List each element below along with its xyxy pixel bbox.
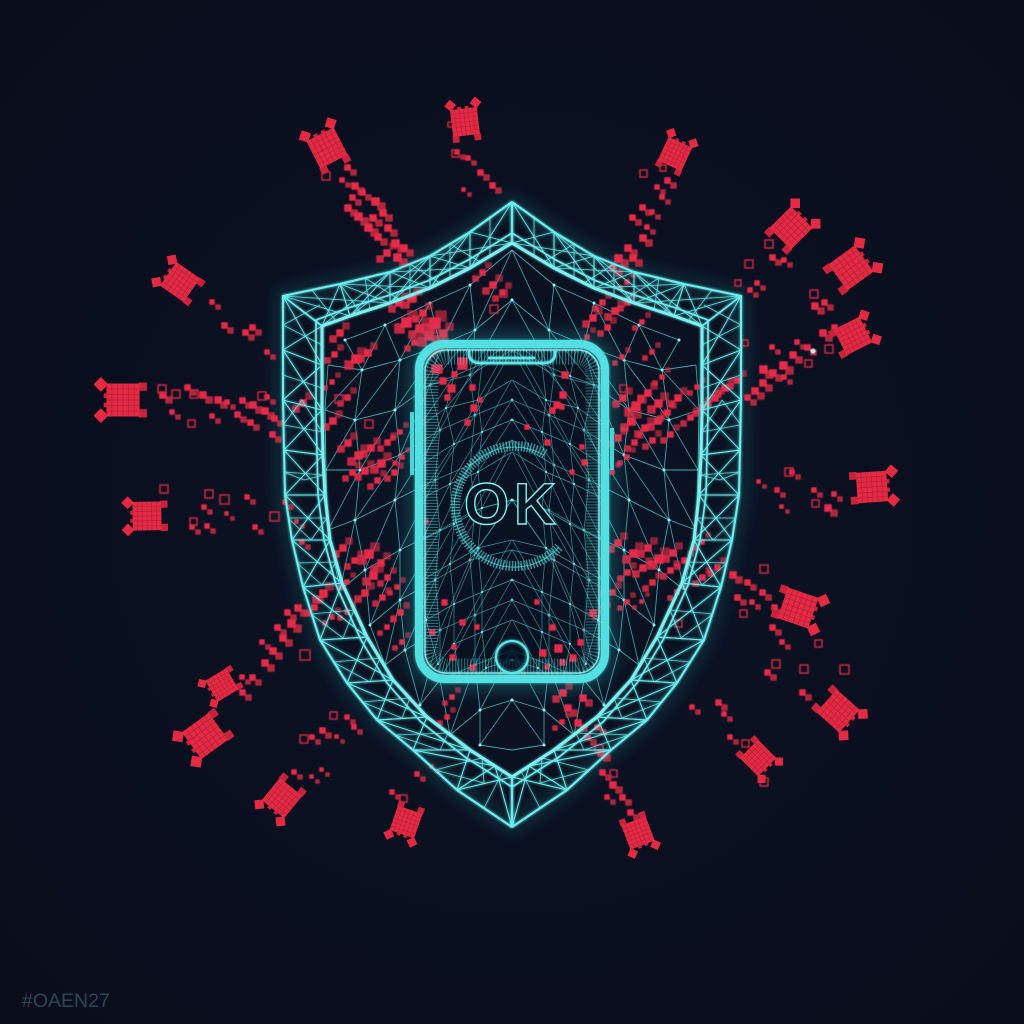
- bot 13: [250, 769, 311, 830]
- bot 8: [769, 579, 833, 639]
- bot 14: [168, 703, 238, 772]
- particles: hollow squares: [158, 122, 849, 802]
- shield band: left half: [283, 202, 512, 827]
- stray white node: [810, 348, 816, 354]
- shield glow: [283, 202, 741, 827]
- bot 5: [819, 233, 888, 300]
- particles: cluster density layer: [293, 256, 733, 730]
- phone body outline: [419, 344, 605, 679]
- bot 2: [443, 96, 486, 144]
- phone home button: [496, 641, 528, 673]
- phone glow: [415, 340, 609, 683]
- particles over phone: [425, 358, 596, 670]
- bot 17: [94, 377, 147, 423]
- bot 7: [848, 464, 901, 510]
- attacking bots: [94, 96, 901, 861]
- OK status ring: [454, 446, 560, 567]
- bot 3: [651, 126, 701, 179]
- malicious particle streams: [158, 122, 849, 820]
- OK label: OK: [464, 472, 556, 537]
- bot 1: [296, 114, 356, 177]
- particles: clusters inside shield: [300, 250, 740, 724]
- shield interior mesh: [325, 250, 699, 750]
- bot 11: [614, 809, 663, 861]
- shield band: right half: [512, 202, 741, 827]
- bot 9: [807, 680, 872, 745]
- watermark: #OAEN27: [22, 990, 110, 1012]
- bot 10: [732, 732, 787, 787]
- bot 6: [825, 307, 885, 363]
- particles: stream density layer: [166, 155, 843, 820]
- phone: [401, 326, 623, 697]
- phone screen tint: [419, 344, 605, 679]
- bot 18: [148, 251, 209, 310]
- bot 12: [381, 798, 429, 850]
- phone notch and speaker: [469, 350, 555, 363]
- bot 4: [760, 194, 825, 259]
- particles: cluster density layer two: [306, 243, 746, 717]
- phone side buttons: [412, 412, 612, 475]
- bot 15: [195, 661, 246, 711]
- particles: streams outside the shield: [160, 150, 837, 815]
- phone inner dotted border: [431, 357, 593, 666]
- bot 16: [121, 496, 168, 536]
- phone screen mesh: [423, 348, 601, 675]
